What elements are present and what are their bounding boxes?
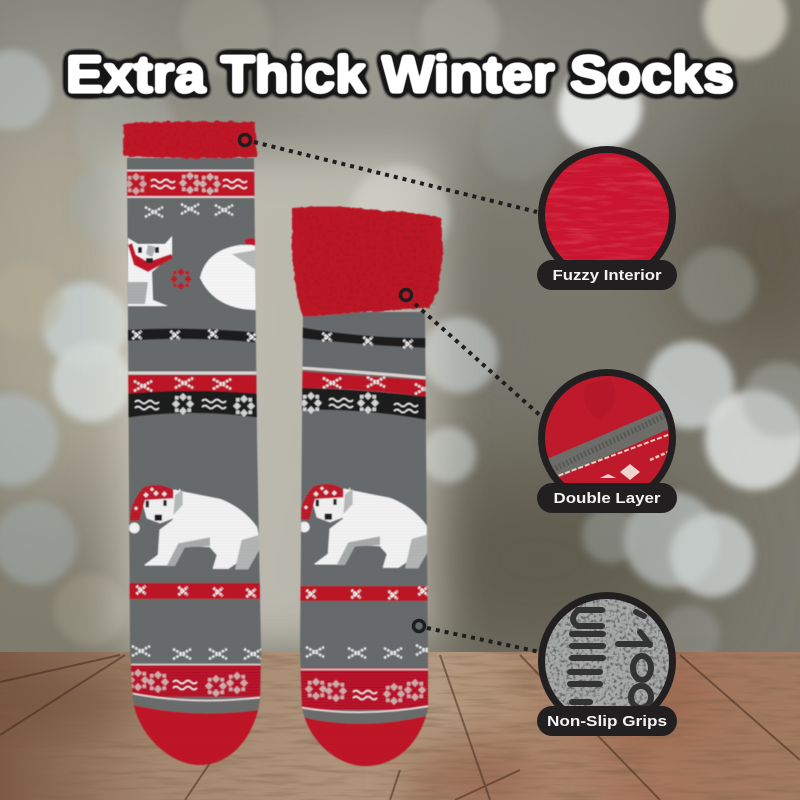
callout: non-slip grips — [537, 592, 677, 736]
red cross band — [298, 586, 430, 601]
wooden table — [0, 652, 800, 800]
label pill: Double Layer — [554, 490, 661, 507]
label pill — [537, 706, 677, 736]
polar bear with red hat — [129, 485, 259, 569]
red and black band — [300, 368, 433, 420]
leader line: double layer — [400, 290, 542, 417]
lower cross row — [132, 646, 262, 659]
swatch: knit layers — [545, 376, 669, 483]
label pill: Non-Slip Grips — [547, 713, 667, 730]
left sock body — [126, 158, 262, 766]
right fuzzy cuff — [292, 207, 443, 317]
label pill — [537, 260, 677, 290]
swatch: grip lettering — [545, 599, 669, 706]
right sock body — [300, 312, 429, 767]
red snowflake band — [300, 667, 429, 714]
label pill: Fuzzy Interior — [552, 267, 662, 284]
label pill — [537, 483, 677, 513]
title: Extra Thick Winter Socks — [66, 46, 734, 104]
left fuzzy cuff — [123, 121, 257, 158]
glow around socks — [115, 150, 440, 650]
callout: double layer — [537, 369, 680, 513]
rear of polar bear — [200, 238, 258, 310]
red cross band — [125, 583, 265, 599]
polar bear with red hat — [299, 484, 429, 568]
left sock — [120, 121, 270, 780]
red snowflake — [170, 268, 192, 290]
lower cross row — [306, 645, 434, 658]
red toe — [134, 704, 258, 766]
leader line: non-slip grips — [414, 620, 540, 652]
red and black band — [125, 373, 262, 418]
red snowflake band — [130, 663, 262, 702]
right sock — [292, 207, 443, 780]
leader line: fuzzy interior — [240, 134, 537, 212]
black cross band — [300, 327, 428, 348]
partial polar bear with scarf — [128, 236, 173, 306]
callout: fuzzy interior — [537, 146, 677, 290]
small cross row — [145, 204, 233, 217]
red toe — [304, 716, 426, 767]
top red pattern band — [125, 170, 260, 197]
swatch: red fleece — [545, 153, 669, 260]
black band — [125, 329, 262, 343]
